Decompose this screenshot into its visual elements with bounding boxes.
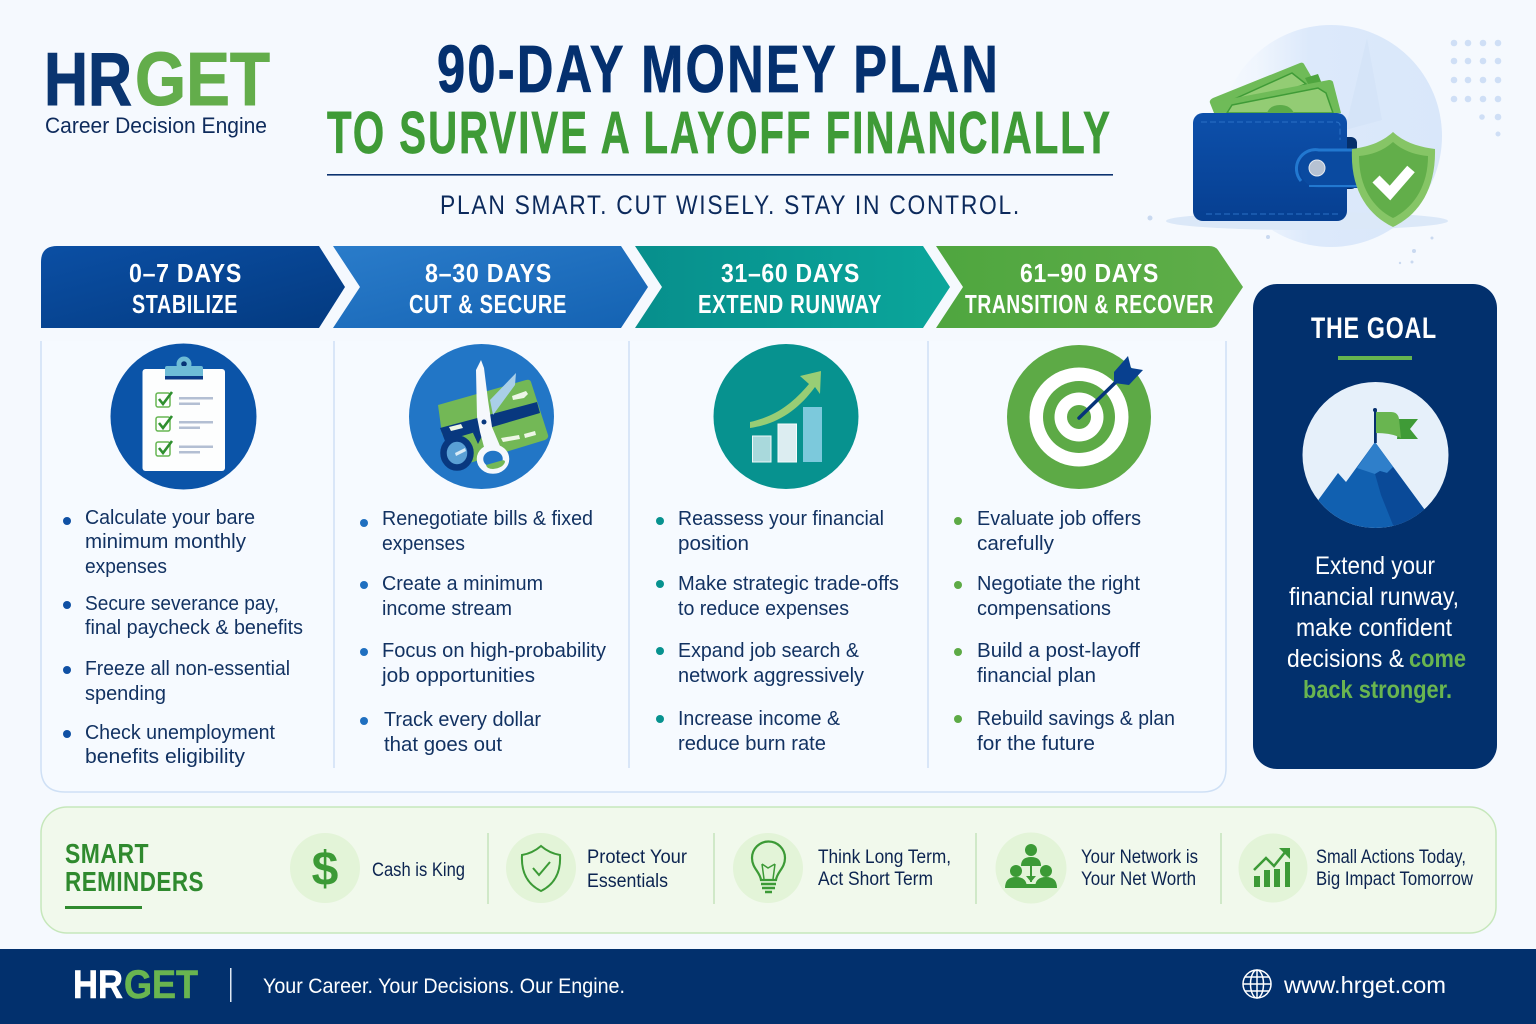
logo: HRGET Career Decision Engine: Career Decision Engine (45, 113, 267, 138)
bullet 4 (63, 721, 275, 768)
bullet 2: Secure severance pay, (85, 592, 279, 615)
column: 31-60 days actions (656, 507, 899, 755)
icon: wallet with cash and shield (1148, 25, 1448, 264)
reminder: cash is king: Cash is King (372, 860, 465, 881)
goal statement: Extend your (1315, 552, 1435, 580)
column: 61-90 days actions (954, 507, 1175, 755)
bullet 4: Increase income & (678, 707, 840, 730)
bullet 1 (954, 507, 1141, 555)
bullet 3: spending (85, 682, 166, 705)
bullet 2 (954, 572, 1140, 620)
bullet 2: Make strategic trade-offs (678, 572, 899, 595)
phase arrow: 0-7 days (41, 246, 345, 328)
phase arrow: 8-30 days: CUT & SECURE (409, 289, 567, 319)
goal statement: back stronger. (1303, 676, 1452, 704)
bullet 4: that goes out (384, 733, 502, 756)
bullet 2: Negotiate the right (977, 572, 1140, 595)
bullet 1: Evaluate job offers (977, 507, 1141, 530)
bullet 4: Rebuild savings & plan (977, 707, 1175, 730)
bullet 1: Reassess your financial (678, 507, 884, 530)
bullet 4: reduce burn rate (678, 732, 826, 755)
reminder: small actions today (1238, 834, 1473, 902)
bullet 1: expenses (382, 532, 465, 555)
icon: scissors cutting card (409, 344, 554, 489)
tagline: PLAN SMART. CUT WISELY. STAY IN CONTROL. (440, 190, 1021, 220)
bullet 3: Focus on high-probability (382, 639, 607, 662)
goal statement: decisions & (1287, 645, 1404, 673)
bullet 3 (656, 639, 865, 687)
phase arrow: 0-7 days: 0–7 DAYS (129, 258, 242, 288)
bullet 2: income stream (382, 597, 512, 620)
footer logo (73, 963, 198, 1007)
goal statement: make confident (1296, 614, 1452, 642)
panel: smart reminders (41, 807, 1496, 933)
phase arrow: 8-30 days: 8–30 DAYS (425, 258, 552, 288)
bullet 3: network aggressively (678, 664, 865, 687)
reminder: think long term (733, 833, 951, 903)
column: 0-7 days actions (63, 506, 303, 768)
reminder: protect your essentials: Essentials (587, 871, 668, 892)
bullet 1: Calculate your bare (85, 506, 255, 529)
phase arrow: 31-60 days (635, 246, 950, 328)
bullet 4: benefits eligibility (85, 745, 246, 768)
reminder: protect your essentials: Protect Your (587, 847, 688, 868)
bullet 2: compensations (977, 597, 1111, 620)
bullet 4 (954, 707, 1175, 755)
phase arrow: 8-30 days (333, 246, 648, 328)
bullet 2 (656, 572, 899, 620)
footer logo: HR (73, 963, 123, 1007)
smart reminders heading: REMINDERS (65, 866, 204, 897)
bullet 2: final paycheck & benefits (85, 616, 303, 639)
website: www.hrget.com (1283, 972, 1446, 998)
title: 90-DAY MONEY PLAN (437, 32, 1000, 107)
phase arrow: 0-7 days: STABILIZE (132, 289, 238, 319)
icon: target with dart (1007, 345, 1151, 489)
goal statement: come (1409, 645, 1466, 673)
smart reminders heading: SMART (65, 838, 149, 869)
reminder: your network: Your Net Worth (1081, 869, 1196, 890)
bullet 1 (63, 506, 255, 578)
bullet 1: minimum monthly (85, 530, 247, 553)
goal statement: financial runway, (1289, 583, 1459, 611)
bullet 4 (656, 707, 840, 755)
bullet 2 (360, 572, 543, 620)
bullet 1: expenses (85, 555, 167, 578)
footer bar (0, 949, 1536, 1024)
reminder: your network: Your Network is (1081, 847, 1198, 868)
icon: globe (1243, 970, 1271, 998)
cash bills (1210, 63, 1341, 113)
icon: clipboard checklist (110, 344, 256, 490)
bullet 3: job opportunities (381, 664, 535, 687)
bullet 3: financial plan (977, 664, 1096, 687)
reminder: cash is king: $ (312, 843, 339, 896)
bullet 4 (360, 708, 541, 756)
bullet 2 (63, 592, 303, 639)
bullet 4: Track every dollar (384, 708, 541, 731)
phase arrow: 61-90 days (936, 246, 1243, 328)
panel: action columns (41, 341, 1226, 792)
bullet 3: Build a post-layoff (977, 639, 1140, 662)
phase arrow: 61-90 days: 61–90 DAYS (1020, 258, 1159, 288)
bullet 3 (360, 639, 607, 687)
goal heading: THE GOAL (1311, 312, 1437, 345)
bullet 3: Expand job search & (678, 639, 859, 662)
reminder: your network (996, 832, 1198, 904)
panel: the goal (1253, 284, 1497, 769)
bullet 3: Freeze all non-essential (85, 657, 290, 680)
bullet 1 (360, 507, 593, 555)
decorative dot grid (1451, 40, 1501, 137)
logo: HRGET Career Decision Engine (44, 37, 270, 138)
reminder: small actions today: Small Actions Today, (1316, 847, 1466, 868)
bullet 3 (63, 657, 290, 705)
icon: mountain with flag (1300, 382, 1448, 535)
bullet 1 (656, 507, 884, 555)
title: TO SURVIVE A LAYOFF FINANCIALLY (327, 100, 1112, 166)
wallet strap (1296, 150, 1358, 188)
footer logo: GET (124, 963, 198, 1007)
bullet 2: to reduce expenses (678, 597, 849, 620)
column: 8-30 days actions (360, 507, 607, 756)
bullet 4: for the future (977, 732, 1095, 755)
bullet 4: Check unemployment (85, 721, 275, 744)
reminder: cash is king (290, 833, 465, 903)
bullet 2: Create a minimum (382, 572, 543, 595)
footer tagline: Your Career. Your Decisions. Our Engine. (263, 975, 625, 998)
reminder: protect your essentials (506, 833, 688, 903)
bullet 1: position (678, 532, 749, 555)
icon: growth chart (714, 344, 858, 489)
bullet 1: carefully (977, 532, 1055, 555)
reminder: think long term: Act Short Term (818, 869, 933, 890)
bullet 3 (954, 639, 1140, 687)
reminder: think long term: Think Long Term, (818, 847, 951, 868)
goal statement (1287, 552, 1466, 704)
smart reminders heading (65, 838, 204, 909)
title (327, 32, 1113, 176)
phase arrow: 31-60 days: EXTEND RUNWAY (698, 289, 882, 319)
logo: HRGET Career Decision Engine: HR (44, 37, 132, 121)
logo: HRGET Career Decision Engine: GET (135, 37, 270, 121)
reminder: small actions today: Big Impact Tomorrow (1316, 869, 1473, 890)
phase arrow: 31-60 days: 31–60 DAYS (721, 258, 860, 288)
phase arrow: 61-90 days: TRANSITION & RECOVER (965, 289, 1214, 319)
bullet 1: Renegotiate bills & fixed (382, 507, 593, 530)
